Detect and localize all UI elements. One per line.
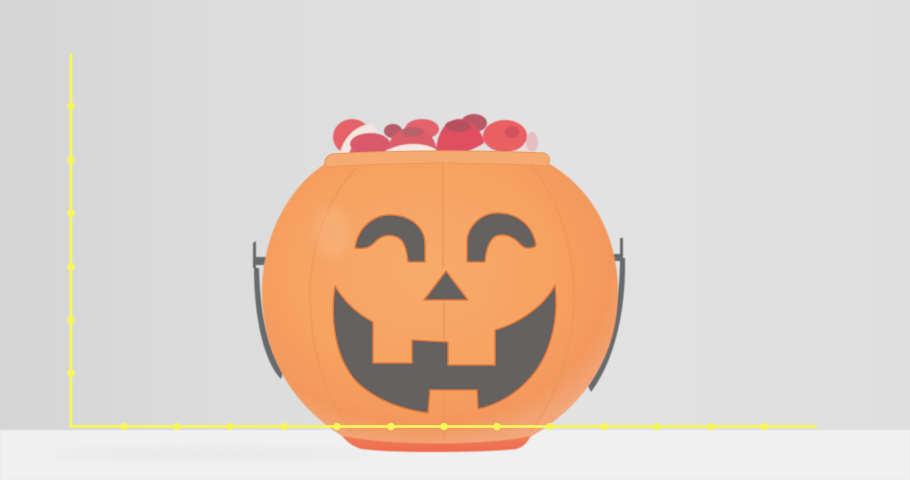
bucket rim	[325, 151, 550, 167]
x-axis markers	[120, 423, 768, 430]
left eye	[355, 215, 425, 262]
mouth	[333, 285, 556, 413]
right handle	[588, 238, 625, 392]
pumpkin bucket	[262, 151, 618, 452]
right eye	[467, 213, 536, 262]
bucket body	[262, 155, 618, 444]
y-axis markers	[67, 102, 75, 377]
axis lines	[71, 53, 817, 426]
candy pile	[333, 114, 538, 156]
chart axes	[67, 53, 817, 430]
panel seams	[310, 163, 574, 440]
nose	[424, 271, 468, 300]
left handle	[253, 241, 283, 379]
jack-o-lantern face	[333, 213, 556, 413]
highlight	[314, 206, 350, 258]
table surface	[0, 430, 910, 480]
bucket base	[335, 425, 535, 452]
